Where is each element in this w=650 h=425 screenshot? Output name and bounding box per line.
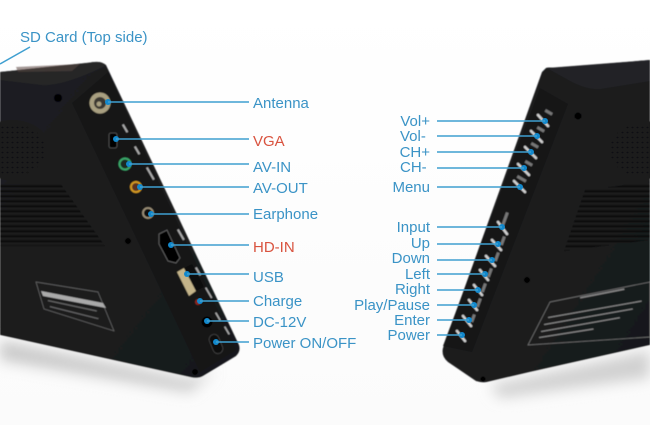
callout: Earphone: Earphone (253, 206, 318, 223)
callout: Play/Pause: Play/Pause (354, 297, 430, 314)
callout: USB: USB (253, 269, 284, 286)
AV-OUT jack (131, 182, 141, 192)
callout: AV-OUT (137, 180, 308, 197)
callout: Up: Up (411, 235, 430, 252)
callout: Power: Power (387, 327, 430, 344)
callout: Input: Input (397, 219, 431, 236)
callout: SD Card (0, 29, 148, 64)
callout: Menu (392, 179, 523, 196)
USB port (177, 268, 196, 296)
callout: Input (397, 219, 505, 236)
bottom screw (192, 369, 198, 375)
panel: left device, connector side (0, 62, 240, 392)
speaker grille (0, 120, 50, 180)
callout: Down: Down (392, 250, 430, 267)
callout: VGA: VGA (253, 133, 285, 150)
callout: Antenna (105, 95, 310, 112)
vent grille (0, 183, 105, 246)
device body left (0, 62, 240, 378)
top face with SD slot (0, 62, 105, 85)
callout: Power (387, 327, 465, 344)
callout: Vol- (400, 128, 540, 145)
callout: SD Card: SD Card (Top side) (20, 29, 148, 46)
callout: AV-IN: AV-IN (253, 159, 291, 176)
callout: HD-IN: HD-IN (253, 239, 295, 256)
connector strip (72, 72, 236, 372)
warning label (528, 282, 650, 345)
top bezel right (547, 60, 650, 89)
HDMI port (159, 230, 180, 263)
callout: Antenna: Antenna (253, 95, 310, 112)
speaker grille right (606, 120, 650, 180)
callout: Vol+ (400, 113, 548, 130)
vent grille right (564, 182, 650, 251)
callout: HD-IN (168, 239, 295, 256)
callout: USB (184, 269, 284, 286)
VGA port (109, 133, 117, 148)
callout: Right (395, 281, 481, 298)
callout: Left: Left (405, 266, 431, 283)
callout: DC-12V: DC-12V (253, 314, 306, 331)
callout: VGA (113, 133, 285, 150)
earphone jack (143, 208, 153, 218)
device body right (443, 60, 650, 382)
floor shadow right (490, 350, 650, 398)
callout: AV-IN (126, 159, 291, 176)
charge LED (195, 299, 201, 305)
callout: Left (405, 266, 488, 283)
callout: Up (411, 235, 501, 252)
callout: Vol-: Vol- (400, 128, 426, 145)
button strip (443, 88, 568, 352)
callout: Charge: Charge (253, 293, 302, 310)
callout: CH+: CH+ (400, 144, 430, 161)
power switch (208, 333, 224, 355)
callout: AV-OUT: AV-OUT (253, 180, 308, 197)
callout: Earphone (148, 206, 318, 223)
callout: CH+ (400, 144, 534, 161)
side buttons (457, 115, 548, 341)
port text marks (122, 124, 230, 335)
callout: CH-: CH- (400, 159, 427, 176)
screw holes (574, 112, 582, 120)
screw hole top (54, 94, 62, 102)
callout: Menu: Menu (392, 179, 430, 196)
AV-IN jack (120, 158, 130, 170)
DC jack (202, 316, 212, 328)
callout: Power ON/OFF: Power ON/OFF (253, 335, 356, 352)
callout: Vol+: Vol+ (400, 113, 430, 130)
callout: Play/Pause (354, 297, 477, 314)
callout: Down (392, 250, 495, 267)
callout: Charge (197, 293, 302, 310)
callout: DC-12V (204, 314, 306, 331)
panel: right device, button side (443, 60, 650, 398)
callout: Enter: Enter (394, 312, 430, 329)
rating label (36, 282, 114, 331)
floor shadow left (0, 340, 215, 392)
callout: CH- (400, 159, 527, 176)
callout: Enter (394, 312, 472, 329)
antenna port (90, 92, 110, 114)
callout: Right: Right (395, 281, 431, 298)
